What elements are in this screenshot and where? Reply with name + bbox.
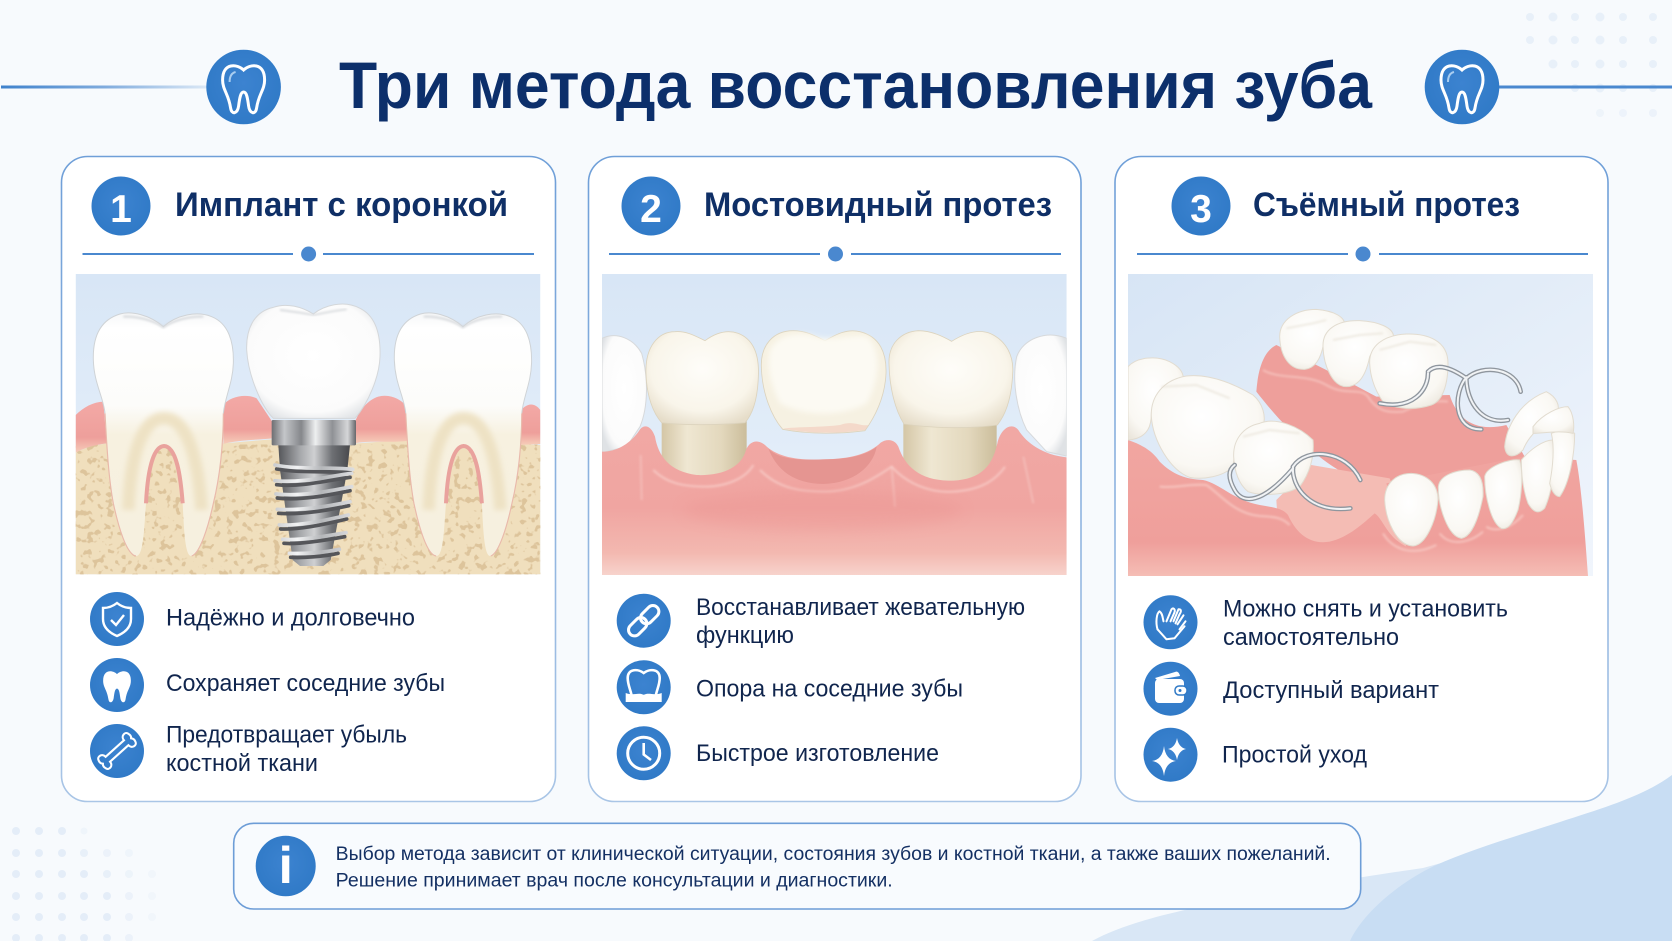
icon: tooth right (1425, 50, 1499, 124)
feature: chewing function: функцию (696, 622, 794, 649)
heading 1: Имплант с коронкой (175, 186, 508, 224)
heading 3: Съёмный протез (1253, 186, 1520, 224)
illustration: implant with crown (76, 274, 540, 574)
number badge 2 (622, 176, 680, 236)
feature: bone: костной ткани (166, 750, 318, 777)
number badge 3: 3 (1190, 188, 1212, 231)
number badge 3 (1172, 176, 1230, 236)
icon: tooth left (206, 50, 281, 124)
divider 3 (1137, 246, 1588, 262)
illustration: removable denture (1128, 274, 1593, 576)
feature: bone (90, 722, 407, 778)
feature: affordable (1144, 662, 1439, 716)
feature: neighbours: Сохраняет соседние зубы (166, 670, 445, 697)
feature: fast (617, 726, 939, 780)
note text (336, 844, 1331, 892)
dot pattern bottom left (12, 827, 156, 941)
heading 2: Мостовидный протез (704, 186, 1052, 224)
icon: info (256, 836, 316, 896)
divider 1 (82, 246, 534, 262)
panel: removable denture (1115, 156, 1608, 802)
number badge 1 (92, 176, 150, 236)
illustration: bridge (602, 274, 1067, 575)
number badge 1: 1 (110, 188, 132, 231)
icon: info: i (278, 837, 293, 895)
feature: support: Опора на соседние зубы (696, 676, 963, 703)
feature: affordable: Доступный вариант (1223, 677, 1439, 704)
callout: info note (234, 823, 1361, 909)
number badge 2: 2 (640, 188, 662, 231)
header line right (1497, 86, 1672, 88)
feature: chewing function: Восстанавливает жевательную (696, 594, 1025, 621)
feature: fast: Быстрое изготовление (696, 740, 939, 767)
divider 2 (609, 246, 1061, 262)
feature: reliable (90, 592, 415, 646)
panel: bridge (588, 156, 1081, 802)
decorative wave bottom right (1092, 775, 1672, 941)
feature: self removal: Можно снять и установить (1223, 596, 1508, 623)
note text: Выбор метода зависит от клинической ситуации, состояния зубов и костной ткани, а также ваших пожеланий. (336, 844, 1331, 865)
feature: self removal (1144, 595, 1508, 651)
dot pattern top right (1526, 12, 1657, 117)
feature: self removal: самостоятельно (1223, 624, 1399, 651)
feature: simple care (1144, 728, 1367, 782)
header line left (1, 86, 207, 88)
feature: bone: Предотвращает убыль (166, 722, 407, 749)
feature: chewing function (617, 594, 1025, 649)
feature: simple care: Простой уход (1222, 742, 1367, 769)
feature: support (617, 660, 963, 714)
feature: reliable: Надёжно и долговечно (166, 605, 415, 632)
panel: implant (62, 156, 556, 802)
feature: neighbours (90, 658, 445, 712)
note text: Решение принимает врач после консультации и диагностики. (336, 871, 893, 892)
title: Три метода восстановления зуба (339, 48, 1373, 122)
